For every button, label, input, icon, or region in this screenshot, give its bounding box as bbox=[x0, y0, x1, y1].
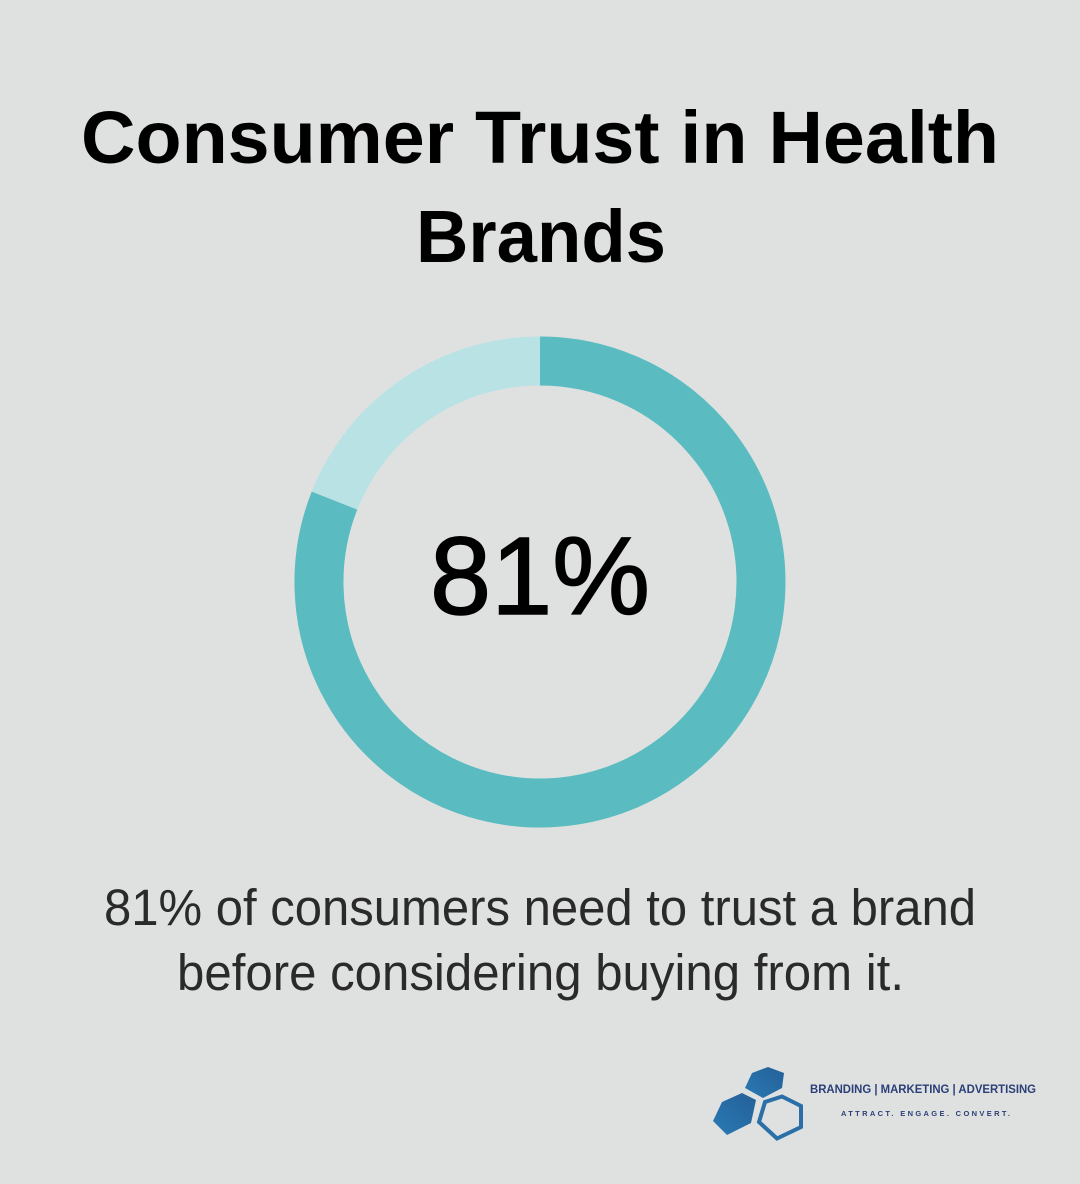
donut chart: 81% bbox=[319, 361, 761, 803]
logo tagline: BRANDING | MARKETING | ADVERTISING bbox=[810, 1084, 1036, 1096]
title: Brands bbox=[416, 195, 666, 278]
logo bbox=[713, 1067, 1036, 1138]
description bbox=[104, 879, 976, 1001]
icon: hexagons bbox=[713, 1067, 801, 1138]
81% segment bbox=[319, 361, 761, 803]
title: Consumer Trust in Health bbox=[81, 96, 999, 179]
logo tagline bbox=[810, 1084, 1036, 1118]
description: before considering buying from it. bbox=[177, 944, 904, 1001]
logo tagline: ATTRACT. ENGAGE. CONVERT. bbox=[841, 1109, 1010, 1118]
donut value: 81% bbox=[430, 515, 650, 638]
title bbox=[81, 96, 999, 278]
description: 81% of consumers need to trust a brand bbox=[104, 879, 976, 936]
remaining segment bbox=[334, 361, 540, 501]
